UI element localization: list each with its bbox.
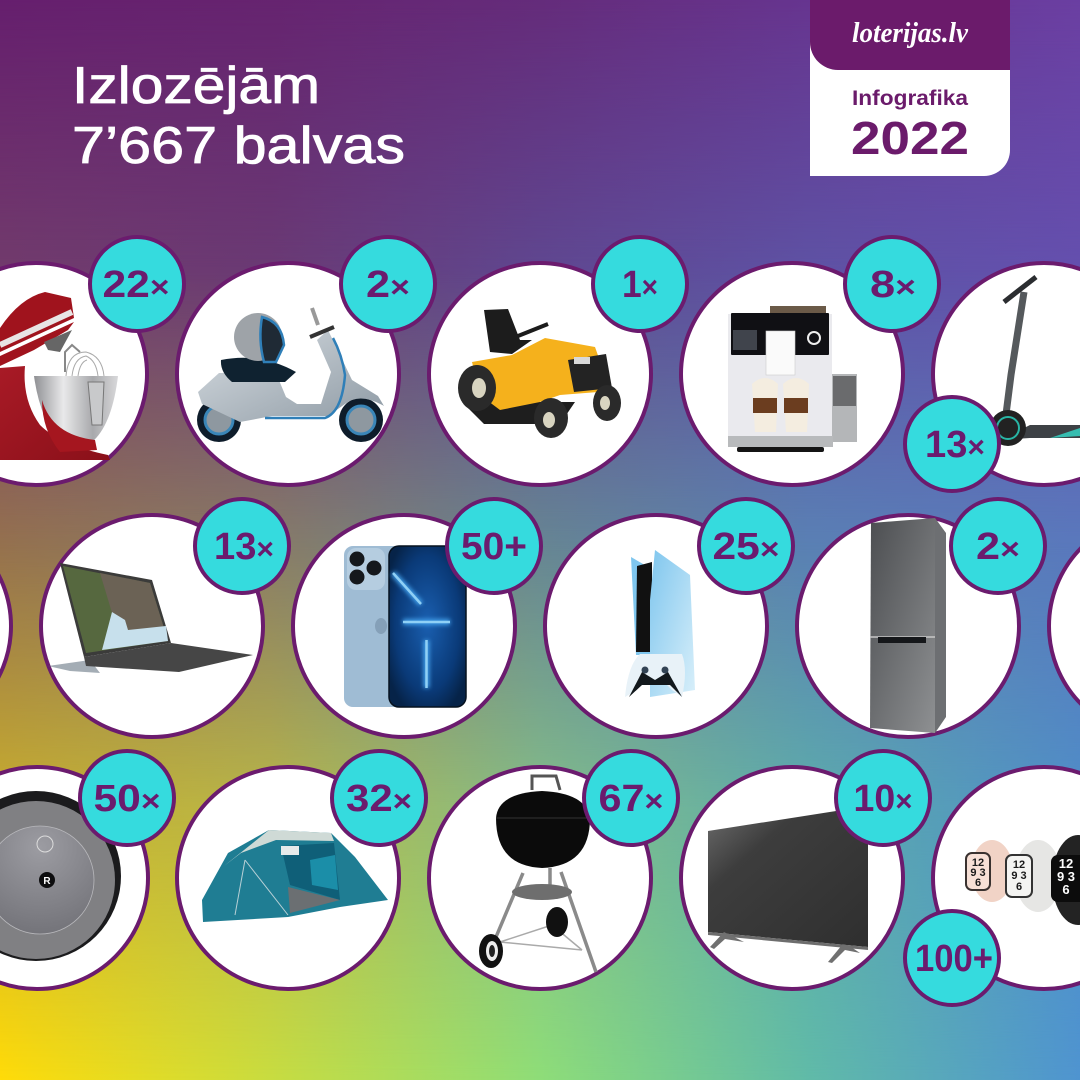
badge: 67×: 67× (598, 778, 664, 820)
title (72, 57, 405, 175)
panel: tent (177, 751, 426, 989)
label: Infografika: Infografika (852, 87, 968, 110)
title: Izlozējām (72, 57, 320, 115)
badge: 10× (836, 751, 930, 845)
icon: lawn tractor (458, 309, 621, 438)
badge: 50+: 50+ (461, 526, 527, 568)
panel: laptop (41, 499, 289, 737)
badge: 22×: 22× (102, 264, 169, 306)
badge: 25×: 25× (712, 526, 780, 568)
label: year 2022: 2022 (851, 112, 969, 164)
badge: 2×: 2× (366, 264, 410, 306)
panel: kettle grill (429, 751, 678, 989)
badge: 2× (951, 499, 1045, 593)
icon: stand mixer (0, 292, 118, 460)
panel: PlayStation 5 (545, 499, 793, 737)
icon: smart watches (966, 835, 1080, 925)
panel: robot vacuum (0, 751, 174, 989)
panel: smart watches (905, 767, 1080, 1005)
badge: 13×: 13× (214, 526, 274, 568)
logo: loterijas.lv (810, 0, 1010, 70)
badge: 13× (195, 499, 289, 593)
icon: electric scooter (197, 308, 384, 442)
panel: coffee machine (681, 237, 939, 485)
badge: 25× (699, 499, 793, 593)
icon: smart watches: 12 (972, 857, 984, 869)
badge: 50× (80, 751, 174, 845)
badge: 67× (584, 751, 678, 845)
badge: 50×: 50× (94, 778, 160, 820)
logo: loterijas.lv: loterijas.lv (852, 18, 969, 49)
panel: television (681, 751, 930, 989)
badge: 2× (341, 237, 435, 331)
icon: kettle grill (479, 776, 596, 972)
icon: smart watches: 9 3 (970, 867, 986, 879)
icon: smart watches: 6 (1016, 881, 1022, 893)
icon: PlayStation 5 (625, 550, 695, 697)
icon: electric kick scooter (990, 277, 1080, 446)
badge: 8× (845, 237, 939, 331)
icon: coffee machine (728, 306, 857, 452)
badge: 8×: 8× (870, 264, 916, 306)
badge: 13×: 13× (925, 424, 985, 466)
badge: 2×: 2× (976, 526, 1020, 568)
panel: iPhone (293, 499, 541, 737)
badge: 100+: 100+ (915, 938, 993, 980)
panel: left partial circle (0, 515, 11, 737)
title: 7’667 balvas (72, 117, 405, 175)
panel: fridge (797, 499, 1045, 737)
panel: electric scooter (177, 237, 435, 485)
badge: 10×: 10× (854, 778, 912, 820)
icon: tent (202, 830, 388, 922)
icon: smart watches: 6 (1062, 882, 1070, 897)
icon: robot vacuum: R (43, 876, 51, 887)
badge: 1× (593, 237, 687, 331)
icon: smart watches: 12 (1059, 856, 1073, 871)
icon: smart watches: 9 3 (1011, 870, 1027, 882)
icon: television (708, 806, 868, 963)
icon: smart watches: 9 3 (1057, 869, 1075, 884)
badge: 32×: 32× (346, 778, 412, 820)
logo badge: Infografika 2022 (810, 0, 1010, 176)
panel: stand mixer (0, 237, 184, 485)
badge: 50+ (447, 499, 541, 593)
panel: lawn tractor (429, 237, 687, 485)
icon: robot vacuum (0, 791, 121, 961)
badge: 100+ (905, 911, 999, 1005)
icon: fridge (870, 518, 946, 733)
icon: iPhone (344, 546, 466, 707)
badge: 13× (905, 397, 999, 491)
badge: 22× (90, 237, 184, 331)
icon: smart watches: 12 (1013, 859, 1025, 871)
badge: 1×: 1× (622, 264, 658, 306)
icon: laptop (48, 563, 253, 673)
icon: smart watches: 6 (975, 877, 981, 889)
panel: electric kick scooter (905, 263, 1080, 491)
badge: 32× (332, 751, 426, 845)
panel: right partial circle (1049, 515, 1080, 737)
